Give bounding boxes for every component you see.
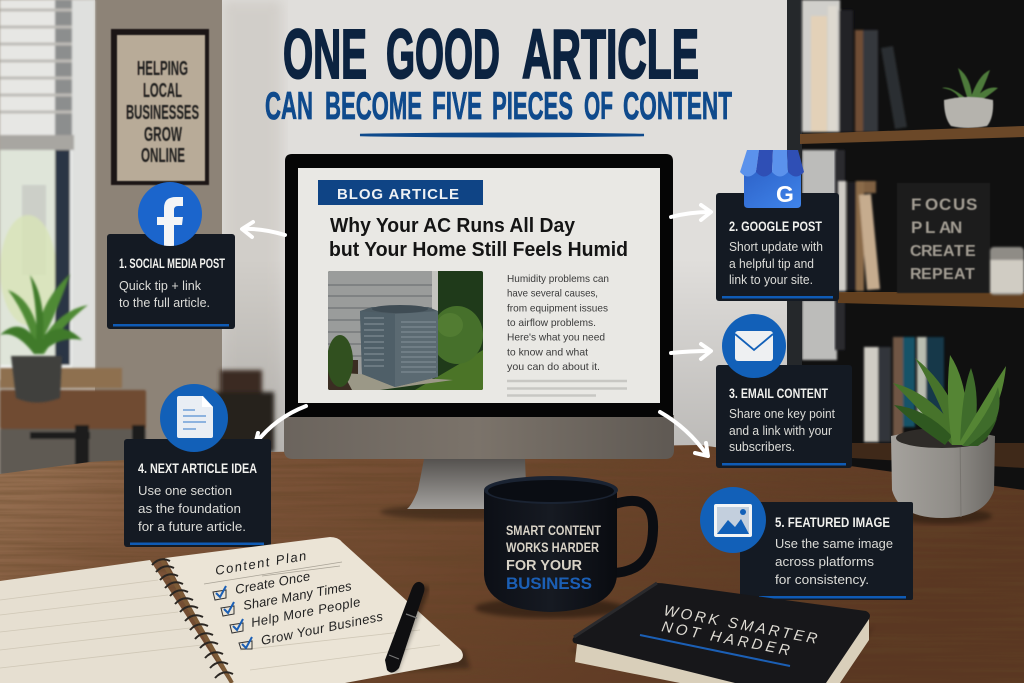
icon: picture: [700, 487, 766, 553]
article headline: [329, 215, 628, 261]
dark basket behind card four: [212, 370, 274, 452]
mug slogan: FOR YOUR: [506, 558, 583, 574]
desk surface: [0, 440, 1024, 683]
concrete pot with succulent: [891, 355, 1006, 524]
content plan checklist: Create Once: [234, 568, 311, 597]
monitor chin: [284, 415, 674, 459]
card 2: google post: Short update with: [729, 240, 823, 254]
letter board: FOCUS: [911, 195, 977, 214]
middle shelf books: [838, 181, 880, 291]
card 4: next article idea: 4. NEXT ARTICLE IDEA: [138, 460, 257, 476]
coffee mug: [475, 476, 653, 618]
card 1: social media post: to the full article.: [119, 296, 210, 310]
icon: facebook: [138, 182, 202, 248]
card 5: featured image: 5. FEATURED IMAGE: [775, 514, 890, 530]
title line two: CAN: [265, 85, 313, 128]
monitor stand: [407, 459, 527, 509]
potted plant on sill: [0, 274, 88, 402]
title underline: [360, 134, 644, 136]
letter board: PLAN: [911, 218, 962, 237]
card 3: email content: subscribers.: [729, 440, 795, 454]
content plan checklist: Grow Your Business: [260, 608, 385, 648]
wall poster: LOCAL: [143, 80, 182, 102]
letter board: CREATE: [910, 243, 976, 260]
top shelf books: [802, 0, 907, 132]
title line two: BECOME: [325, 85, 422, 128]
wall poster: GROW: [144, 124, 182, 146]
card 1: social media post: 1. SOCIAL MEDIA POST: [119, 255, 225, 271]
desktop monitor: [284, 154, 674, 520]
article summary text: Here's what you need: [507, 332, 605, 344]
card 4: next article idea: [124, 384, 271, 547]
article summary text: from equipment issues: [507, 302, 608, 314]
letter board: REPEAT: [910, 266, 975, 283]
card 2: google post: a helpful tip and: [729, 257, 814, 271]
title line one: [283, 15, 699, 93]
glass jar: [990, 247, 1024, 295]
bookshelf: [787, 0, 1024, 510]
title line two: OF: [584, 85, 613, 128]
card 5: featured image: Use the same image: [775, 537, 893, 551]
hardcover book: [569, 583, 874, 683]
icon: document: [160, 384, 228, 452]
side table and window sill: [0, 368, 146, 475]
wooden shelves: [800, 126, 1024, 144]
card 5: featured image: [700, 487, 913, 600]
article summary text: have several causes,: [507, 288, 598, 300]
content plan checklist: Content Plan: [214, 548, 307, 578]
mug slogan: [506, 523, 602, 593]
book title: NOT HARDER: [660, 618, 791, 659]
icon: envelope: [722, 314, 786, 378]
article summary text: you can do about it.: [507, 361, 600, 373]
window with blinds: [0, 0, 95, 380]
monitor screen: [298, 168, 660, 403]
pen: [385, 582, 426, 673]
notebook spiral binding: [152, 559, 233, 683]
arrow: monitor to next article idea: [255, 406, 306, 445]
title line two: CONTENT: [623, 85, 732, 128]
lower shelf books: [864, 337, 944, 442]
card 4: next article idea: Use one section: [138, 484, 232, 498]
wall poster: HELPING: [137, 58, 188, 80]
succulent leaves: [893, 355, 1006, 446]
card 4: next article idea: as the foundation: [138, 502, 241, 516]
wall poster: BUSINESSES: [126, 102, 199, 124]
card 2: google post: [716, 150, 839, 301]
letter board: [897, 183, 990, 293]
article summary text: [507, 273, 609, 373]
blog article label: BLOG ARTICLE: [337, 186, 459, 203]
article summary text: to know and what: [507, 346, 588, 358]
air conditioner photo: [327, 271, 483, 390]
wall poster: [111, 29, 209, 185]
card 2: google post: 2. GOOGLE POST: [729, 218, 822, 234]
card 1: social media post: [107, 182, 235, 329]
mug slogan: BUSINESS: [506, 574, 592, 593]
title: [265, 15, 732, 136]
title line two: FIVE: [432, 85, 482, 128]
arrow: monitor to email content: [671, 344, 711, 359]
article summary text: to airflow problems.: [507, 317, 596, 329]
content plan checklist: Share Many Times: [242, 578, 353, 613]
book title: WORK SMARTER: [662, 602, 819, 648]
mug slogan: SMART CONTENT: [506, 523, 602, 538]
card 5: featured image: for consistency.: [775, 573, 869, 587]
title line two: PIECES: [492, 85, 573, 128]
monitor bezel: [285, 154, 673, 417]
arrow: monitor to google post: [671, 205, 711, 220]
content plan checklist: Help More People: [250, 594, 362, 630]
card 1: social media post: Quick tip + link: [119, 279, 202, 293]
blog article label: [318, 180, 483, 205]
checkboxes: [213, 586, 252, 649]
card 2: google post: link to your site.: [729, 273, 813, 287]
card 3: email content: Share one key point: [729, 407, 835, 421]
article headline: but Your Home Still Feels Humid: [329, 239, 628, 261]
small plant on top shelf: [942, 68, 998, 128]
card 5: featured image: across platforms: [775, 555, 874, 569]
title line two: [265, 85, 732, 128]
mug slogan: WORKS HARDER: [506, 540, 599, 555]
title line one: ONE: [283, 15, 367, 93]
article headline: Why Your AC Runs All Day: [330, 215, 576, 237]
arrow: monitor to social media post: [242, 222, 285, 237]
icon: google business store: [740, 150, 804, 208]
spiral notebook: [0, 537, 470, 683]
wall poster: ONLINE: [141, 145, 185, 167]
card 3: email content: 3. EMAIL CONTENT: [729, 385, 828, 401]
content plan checklist: [204, 548, 385, 649]
card 3: email content: [716, 314, 852, 468]
title line one: ARTICLE: [522, 15, 699, 93]
arrow: monitor to featured image: [660, 412, 708, 456]
article summary text: Humidity problems can: [507, 273, 609, 285]
icon: google business store: G: [776, 181, 794, 207]
title line one: GOOD: [386, 15, 500, 93]
card 4: next article idea: for a future article.: [138, 520, 246, 534]
card 3: email content: and a link with your: [729, 424, 832, 438]
